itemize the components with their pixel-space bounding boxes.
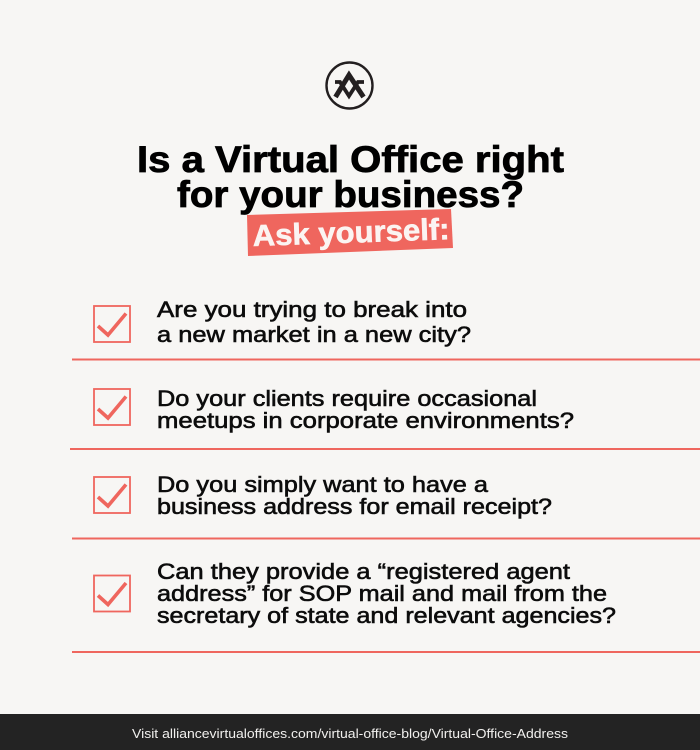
question text 1: a new market in a new city? xyxy=(157,322,471,347)
icon: checkbox 4 xyxy=(94,576,130,612)
callout: ask yourself: Ask yourself: xyxy=(252,213,450,253)
question text 4 xyxy=(157,559,616,628)
panel: question 3 xyxy=(72,472,700,540)
question text 2: meetups in corporate environments? xyxy=(157,408,574,433)
question text 4: secretary of state and relevant agencies? xyxy=(157,603,616,628)
icon: checkbox 2 xyxy=(94,389,130,425)
question text 3: Do you simply want to have a xyxy=(157,472,489,497)
title: for your business? xyxy=(177,174,524,215)
footer bar: Visit alliancevirtualoffices.com/virtual-office-blog/Virtual-Office-Address xyxy=(132,726,569,741)
question text 1: Are you trying to break into xyxy=(157,297,467,322)
panel: question 1 xyxy=(72,297,700,360)
title xyxy=(137,139,564,215)
question text 2: Do your clients require occasional xyxy=(157,386,537,411)
question text 1 xyxy=(157,297,471,347)
icon: checkbox 3 xyxy=(94,477,130,513)
question text 2 xyxy=(157,386,574,433)
question text 4: address” for SOP mail and mail from the xyxy=(157,581,607,606)
panel: question 2 xyxy=(70,386,700,450)
question text 3 xyxy=(157,472,552,519)
icon: checkbox 1 xyxy=(94,306,130,342)
title: Is a Virtual Office right xyxy=(137,139,564,180)
question text 4: Can they provide a “registered agent xyxy=(157,559,571,584)
panel: question 4 xyxy=(72,559,700,653)
footer bar xyxy=(0,714,700,750)
question text 3: business address for email receipt? xyxy=(157,494,552,519)
icon: company logo xyxy=(326,62,372,108)
